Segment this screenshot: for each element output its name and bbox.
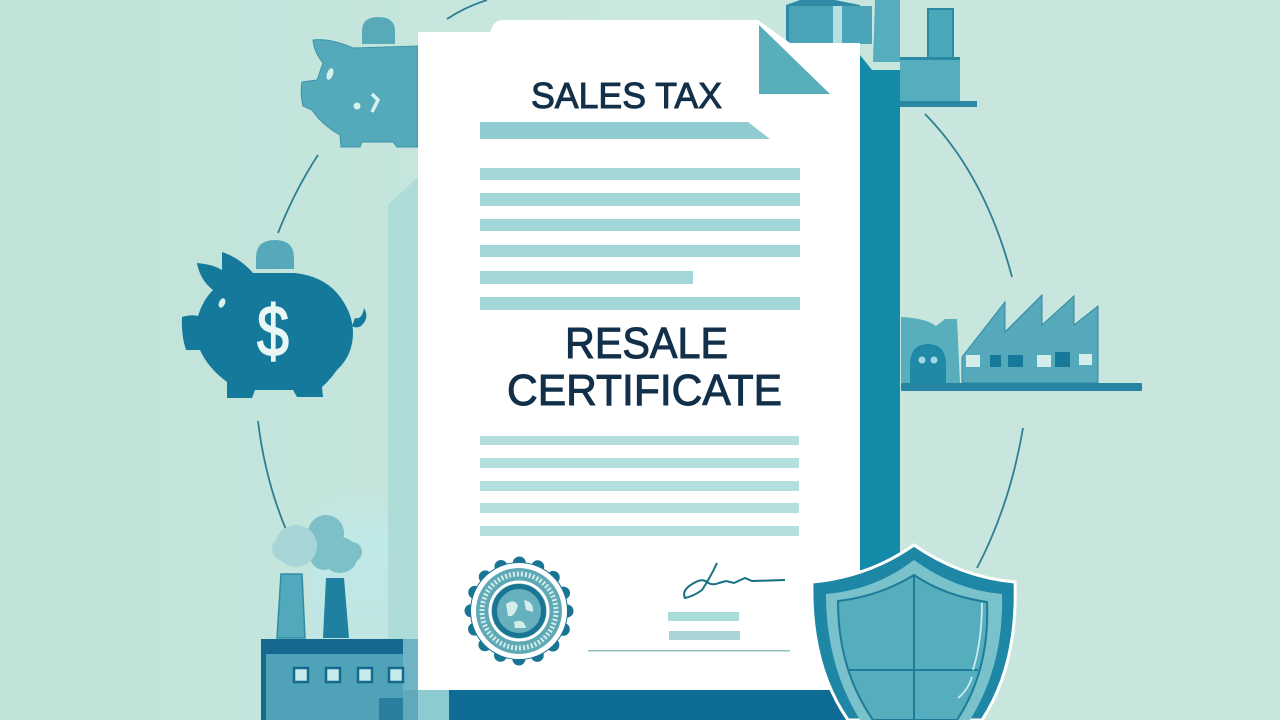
document bottom edge <box>449 690 849 720</box>
piggy bank: lower, dark with dollar sign <box>182 240 366 398</box>
signature <box>684 563 785 598</box>
document page <box>418 20 860 690</box>
upper text lines <box>480 168 800 310</box>
piggy bank: lower, dark with dollar sign: $ <box>257 292 289 372</box>
heading: sales tax: SALES TAX <box>531 75 722 116</box>
factory: top right <box>786 0 977 107</box>
back page <box>388 177 418 640</box>
factory: right middle <box>901 295 1142 391</box>
title: resale certificate <box>507 319 782 415</box>
factory: bottom left <box>261 515 449 720</box>
smoke glow behind bottom-left factory <box>312 488 388 640</box>
shield <box>812 545 1015 720</box>
signature lines <box>588 612 790 652</box>
circular connecting arcs <box>258 0 1023 568</box>
seal <box>470 562 568 660</box>
page fold <box>759 25 830 94</box>
title: resale certificate: CERTIFICATE <box>507 366 782 415</box>
piggy bank: upper, teal <box>301 17 418 147</box>
document spine <box>860 55 900 570</box>
title: resale certificate: RESALE <box>565 319 728 368</box>
lower text lines <box>480 436 799 536</box>
heading bar <box>480 122 770 139</box>
